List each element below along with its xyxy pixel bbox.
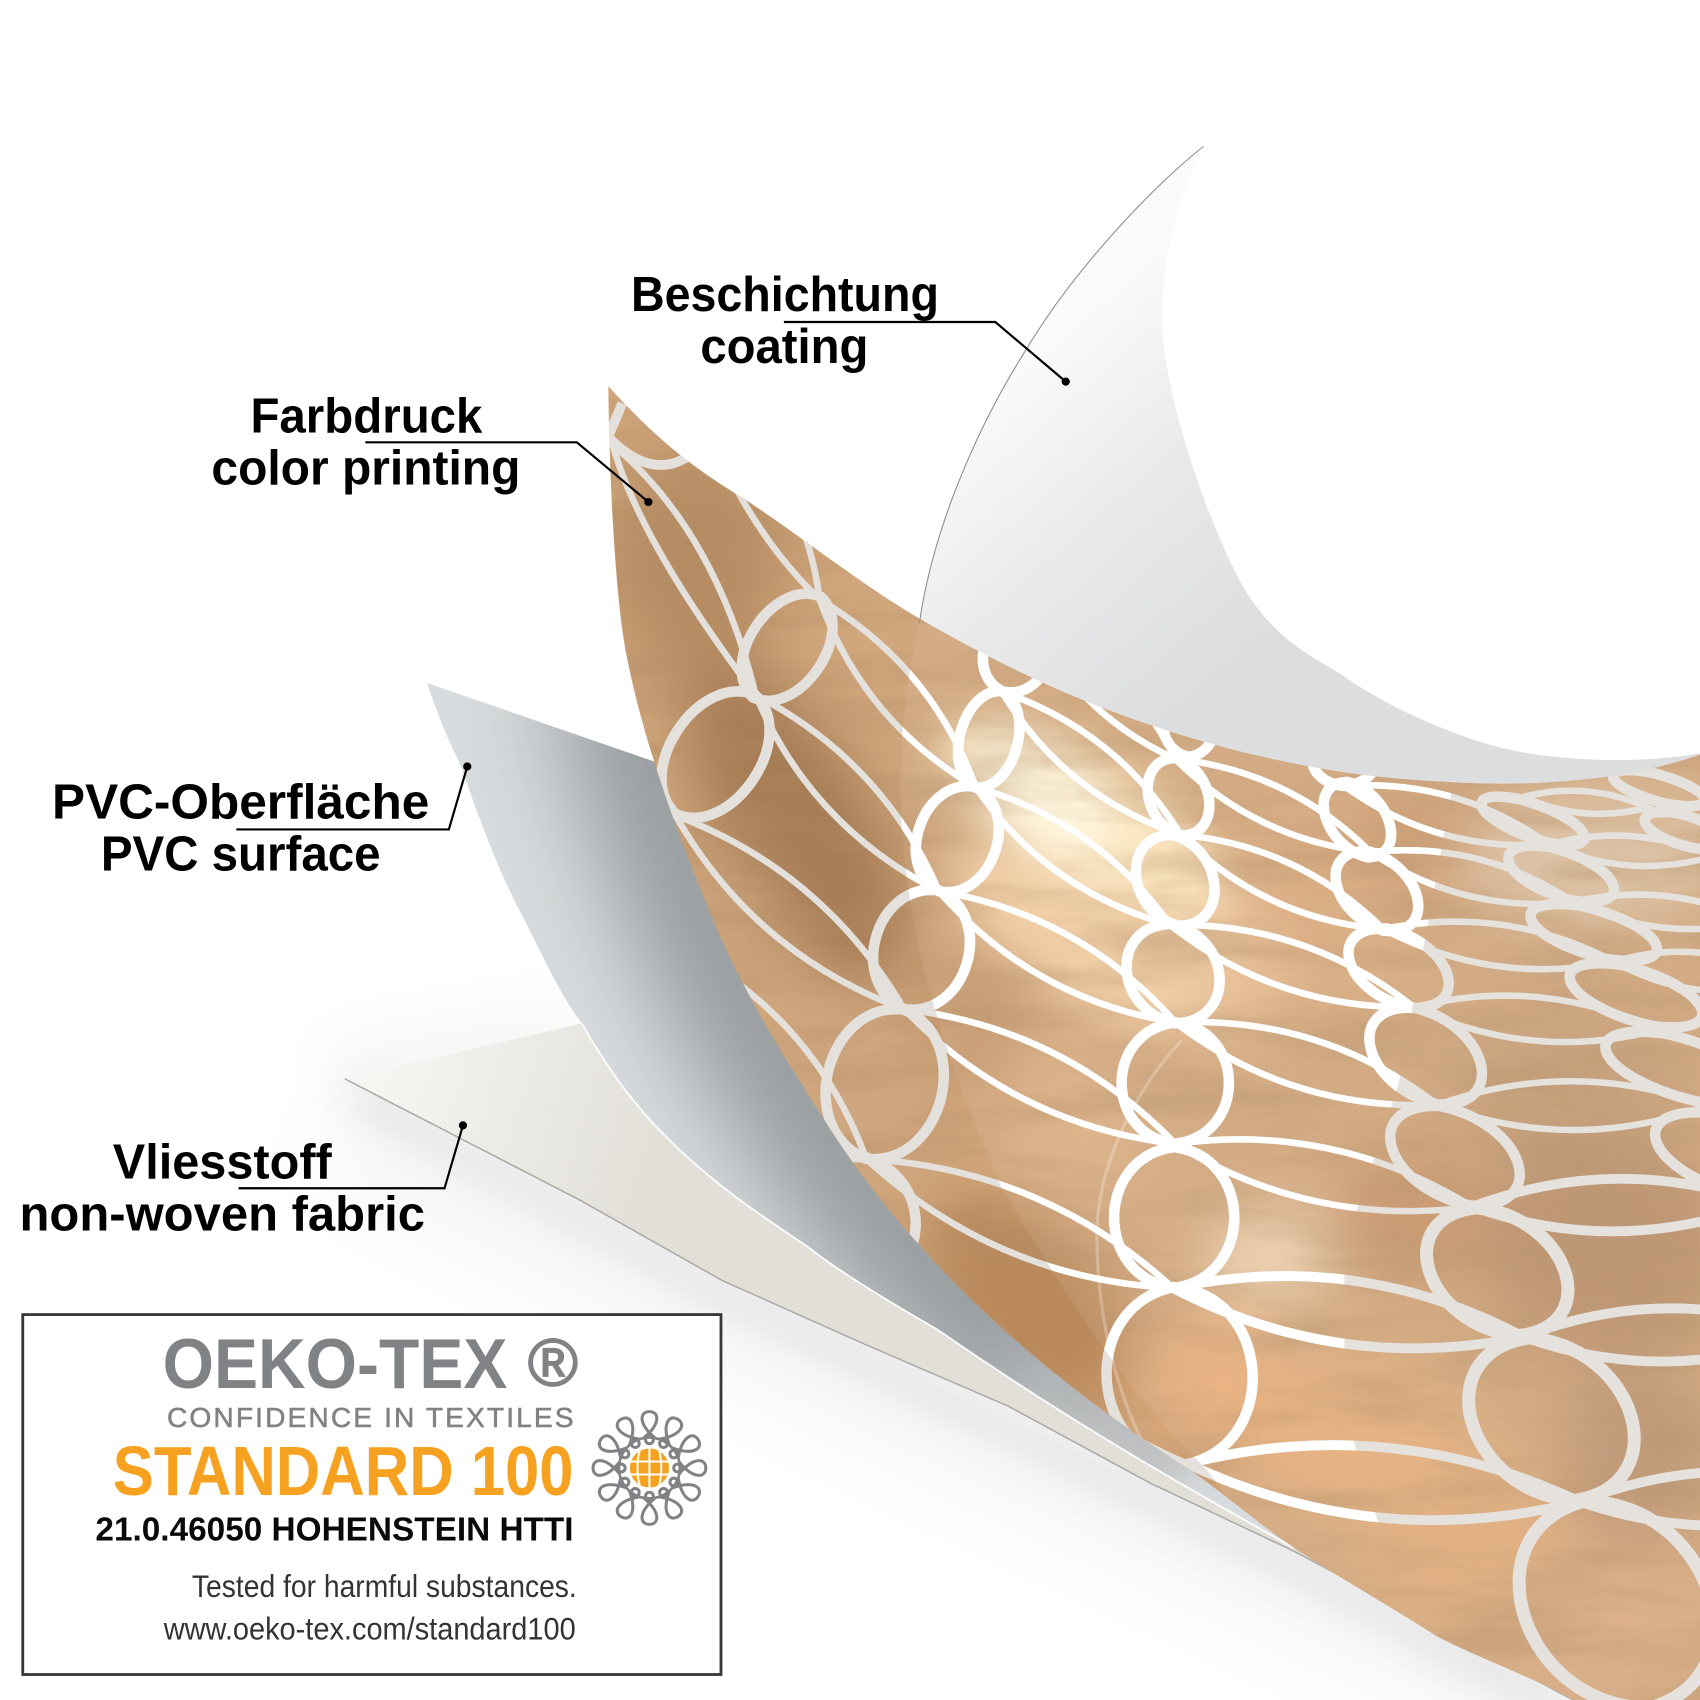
- brand name: OEKO-TEX: [163, 1324, 507, 1403]
- layer: color printing: [585, 369, 1700, 1700]
- label: Vliesstoff / non-woven fabric: [20, 1121, 467, 1242]
- icon: knot wreath with globe: [593, 1412, 706, 1524]
- label: Vliesstoff / non-woven fabric: non-woven fabric: [20, 1188, 425, 1242]
- label: Vliesstoff / non-woven fabric: Vliesstoff: [113, 1136, 333, 1190]
- label: Beschichtung / coating: Beschichtung: [631, 268, 939, 322]
- label: Beschichtung / coating: [631, 268, 1070, 386]
- certificate panel: OEKO-TEX: [23, 1315, 721, 1675]
- registered mark: ®: [528, 1326, 578, 1401]
- background shadow: [325, 1030, 1572, 1700]
- standard name: STANDARD 100: [113, 1432, 574, 1510]
- layer: coating: [919, 146, 1700, 784]
- label: Farbdruck / color printing: [211, 390, 652, 506]
- tested note: Tested for harmful substances.: [192, 1569, 577, 1604]
- layer: PVC surface: [427, 651, 1301, 1548]
- label: Farbdruck / color printing: color printing: [211, 442, 520, 496]
- label: PVC-Oberfläche / PVC surface: [52, 762, 471, 882]
- layer: non-woven fabric: [345, 1023, 1573, 1700]
- tagline: CONFIDENCE IN TEXTILES: [167, 1401, 574, 1433]
- label: PVC-Oberfläche / PVC surface: PVC-Oberfläche: [52, 776, 429, 830]
- label: Farbdruck / color printing: Farbdruck: [250, 390, 483, 444]
- label: PVC-Oberfläche / PVC surface: PVC surface: [101, 828, 381, 882]
- label: Beschichtung / coating: coating: [700, 320, 868, 374]
- certificate number: 21.0.46050 HOHENSTEIN HTTI: [95, 1512, 574, 1549]
- website: www.oeko-tex.com/standard100: [163, 1611, 576, 1646]
